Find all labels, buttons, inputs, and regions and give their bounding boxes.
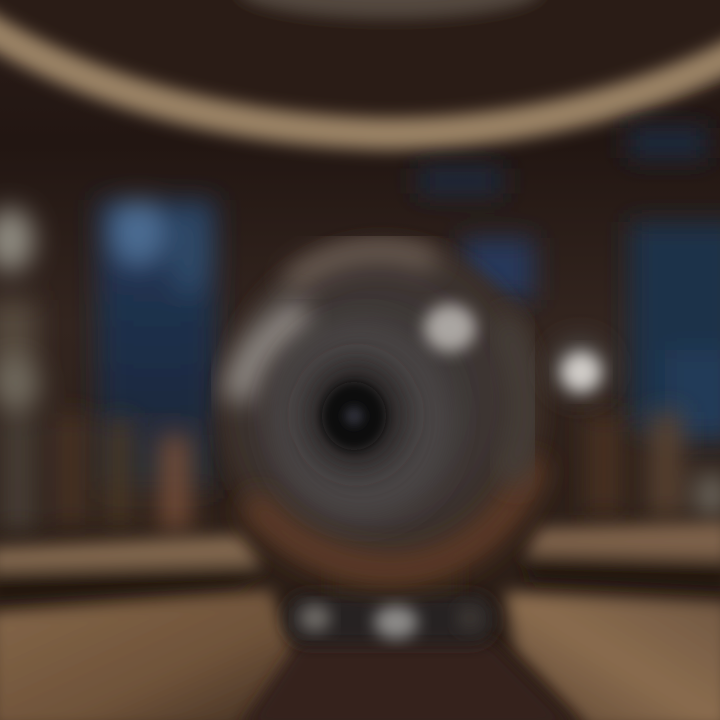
lens middle ring [304, 359, 408, 471]
sphere left crescent highlight [238, 310, 305, 400]
collar highlight center [374, 605, 418, 639]
collar highlight left [299, 604, 331, 632]
sphere stand base [240, 560, 580, 720]
ceiling curved light band [0, 18, 720, 134]
sphere copper lower rim [250, 460, 535, 570]
lens center glint [345, 407, 363, 425]
right window [630, 222, 720, 440]
left counter [0, 535, 262, 606]
right counter [525, 522, 720, 592]
lens outer ring [270, 320, 454, 520]
collar highlight right [456, 604, 484, 632]
right shelf objects [588, 412, 720, 519]
floor right [505, 592, 720, 720]
floor left [0, 590, 300, 720]
ceiling dome [0, 0, 720, 132]
sphere right grey side [500, 320, 525, 480]
sphere upper highlight [424, 304, 476, 352]
sphere top rim highlight [290, 250, 435, 285]
small glowing orb [550, 338, 610, 398]
orb highlight [561, 352, 601, 392]
left window [98, 200, 216, 490]
lens pupil [322, 382, 386, 450]
stand collar with lights [285, 594, 495, 644]
distant center windows [418, 128, 708, 300]
sphere [218, 238, 546, 578]
left shelf objects [0, 208, 190, 530]
